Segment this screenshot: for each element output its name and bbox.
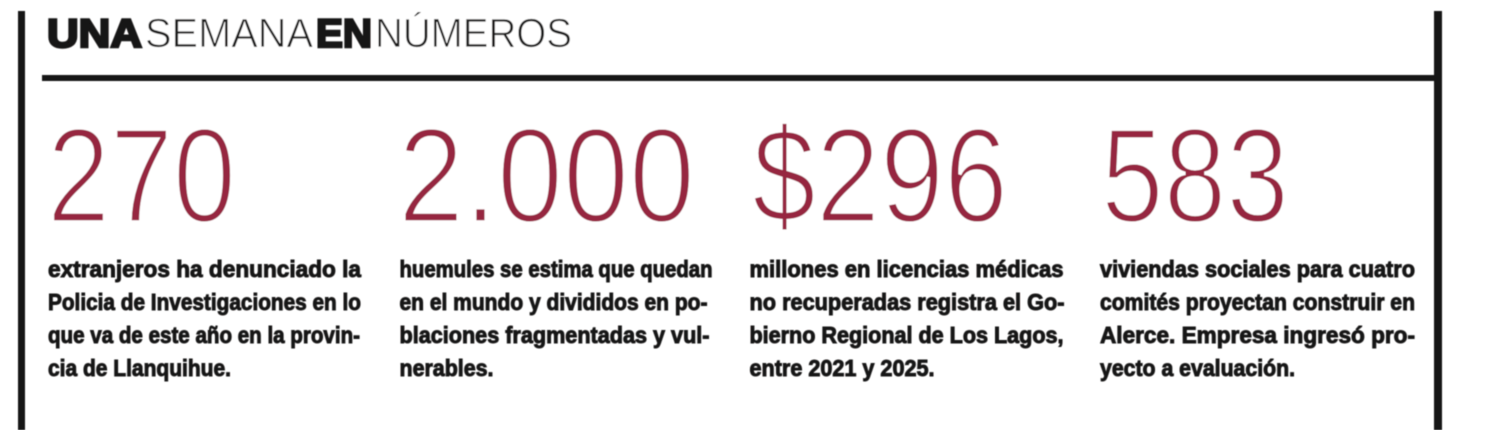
panel: 583 viviendas: viviendas sociales para cuatro bbox=[1100, 256, 1415, 282]
panel: 270 extranjeros: extranjeros ha denunciado la bbox=[48, 256, 361, 282]
heading rule bbox=[42, 75, 1435, 81]
panel: $296 millones: entre 2021 y 2025. bbox=[750, 355, 934, 381]
panel: $296 millones: millones en licencias médicas bbox=[750, 256, 1064, 282]
panel: 2.000 huemules: huemules se estima que quedan bbox=[400, 256, 712, 282]
panel: 583 viviendas: comités proyectan construir en bbox=[1100, 289, 1415, 315]
panel: $296 millones: $296 bbox=[752, 100, 1008, 251]
panel: $296 millones: no recuperadas registra el Go- bbox=[750, 289, 1064, 315]
panel: 583 viviendas: Alerce. Empresa ingresó pro- bbox=[1100, 322, 1415, 348]
panel: 270 extranjeros: 270 bbox=[47, 100, 236, 251]
panel: $296 millones bbox=[750, 100, 1064, 381]
panel: 583 viviendas: yecto a evaluación. bbox=[1100, 355, 1295, 381]
right border bbox=[1434, 11, 1442, 430]
panel: 270 extranjeros bbox=[47, 100, 361, 381]
panel: 2.000 huemules: en el mundo y divididos en po- bbox=[400, 289, 708, 315]
panel: 583 viviendas bbox=[1100, 100, 1415, 381]
panel: 2.000 huemules bbox=[398, 100, 712, 381]
panel: 583 viviendas: 583 bbox=[1101, 100, 1289, 251]
title: SEMANA bbox=[145, 10, 314, 56]
title: NÚMEROS bbox=[375, 10, 572, 56]
left border bbox=[18, 11, 25, 430]
panel: 270 extranjeros: cia de Llanquihue. bbox=[48, 355, 231, 381]
panel: 270 extranjeros: Policia de Investigaciones en lo bbox=[48, 289, 361, 315]
title bbox=[47, 10, 572, 56]
title: EN bbox=[316, 12, 372, 56]
title: UNA bbox=[47, 12, 142, 56]
panel: 2.000 huemules: 2.000 bbox=[398, 100, 695, 251]
panel: $296 millones: bierno Regional de Los Lagos, bbox=[750, 322, 1064, 348]
panel: 270 extranjeros: que va de este año en la provin- bbox=[48, 322, 360, 348]
panel: 2.000 huemules: blaciones fragmentadas y vul- bbox=[400, 322, 710, 348]
panel: 2.000 huemules: nerables. bbox=[400, 355, 494, 381]
